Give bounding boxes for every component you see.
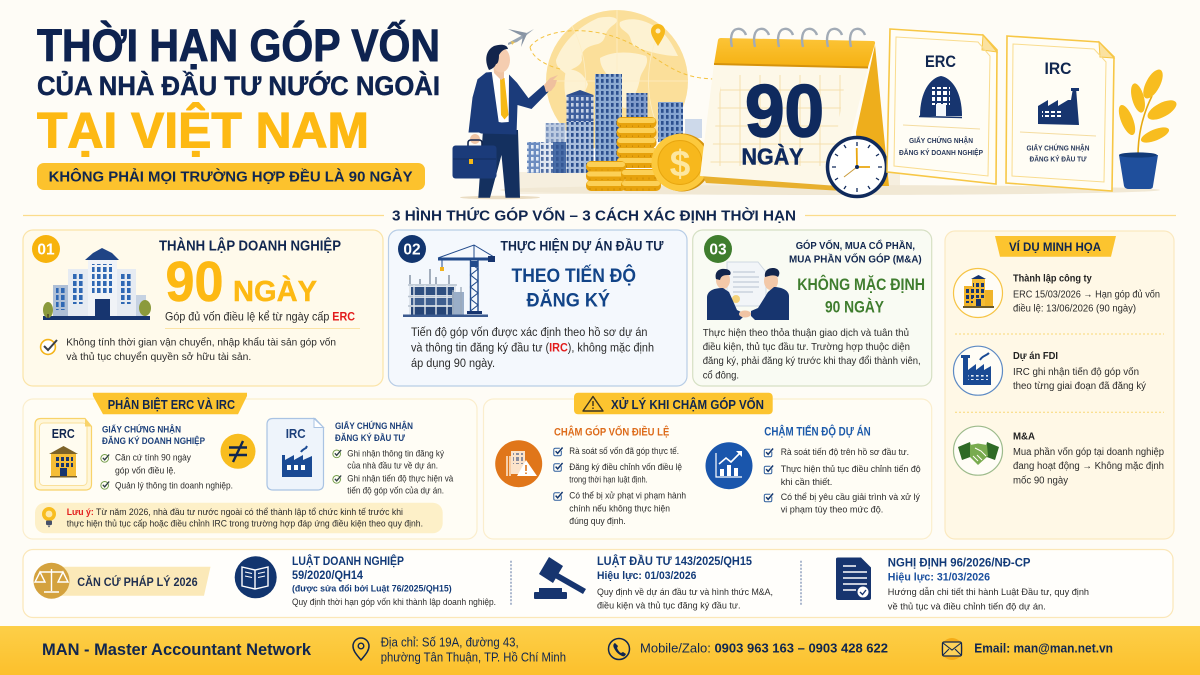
example: M&A: M&A <box>1013 431 1035 442</box>
pointing hand <box>544 75 558 92</box>
legal basis label <box>34 563 210 599</box>
bullet: Ghi nhận tiến độ thực hiện và <box>347 474 454 485</box>
example: M&A: mốc 90 ngày <box>1013 474 1068 486</box>
trousers <box>478 130 520 198</box>
bullet <box>554 462 682 485</box>
card title <box>789 238 922 266</box>
card body: và thông tin đăng ký đầu tư (IRC), không mặc định <box>411 342 654 354</box>
icon: handshake with contract <box>707 262 789 320</box>
icon: growth chart <box>706 442 752 489</box>
law 1: luật doanh nghiệp: Quy định thời hạn góp vốn khi thành lập doanh nghiệp. <box>292 597 496 607</box>
shirt <box>493 72 510 122</box>
card body: điều kiện, thủ tục đầu tư. Trường hợp thuộc diện <box>703 341 910 353</box>
title line 2: CỦA NHÀ ĐẦU TƯ NƯỚC NGOÀI <box>37 69 440 101</box>
coins <box>586 117 711 192</box>
bullet <box>554 491 686 527</box>
card body: áp dụng 90 ngày. <box>411 358 495 370</box>
panel: 01 thành lập doanh nghiệp <box>23 230 383 386</box>
icon: globe <box>530 10 718 152</box>
section heading: 3 HÌNH THỨC GÓP VỐN – 3 CÁCH XÁC ĐỊNH THỜI HẠN <box>392 206 796 224</box>
card title: MUA PHẦN VỐN GÓP (M&A) <box>789 252 922 266</box>
bullet: Quản lý thông tin doanh nghiệp. <box>115 480 233 491</box>
icon: open book <box>235 556 277 598</box>
bullet: Rà soát số vốn đã góp thực tế. <box>569 446 679 457</box>
example: M&A <box>954 426 1164 486</box>
title line 3: TẠI VIỆT NAM <box>37 102 369 158</box>
bullet <box>333 449 444 471</box>
IRC details: GIẤY CHỨNG NHẬN <box>335 420 413 431</box>
panel heading badge: XỬ LÝ KHI CHẬM GÓP VỐN <box>611 397 764 412</box>
email <box>941 638 1113 660</box>
panel heading badge: VÍ DỤ MINH HỌA <box>1009 241 1101 254</box>
document ERC: ERC <box>52 427 75 441</box>
bullet: Đăng ký điều chỉnh vốn điều lệ <box>569 462 682 473</box>
icon: document check <box>836 558 871 600</box>
card title: THÀNH LẬP DOANH NGHIỆP <box>159 236 341 254</box>
card note: và thủ tục chuyển quyền sở hữu tài sản. <box>66 351 251 363</box>
example: dự án FDI: IRC ghi nhận tiến độ góp vốn <box>1013 366 1139 378</box>
ERC caption: GIẤY CHỨNG NHẬN <box>909 135 973 145</box>
hair <box>486 45 508 70</box>
bullet: Rà soát tiến độ trên hồ sơ đầu tư. <box>781 447 909 458</box>
icon: yellow office <box>954 268 1002 318</box>
icon: green handshake <box>954 426 1002 475</box>
bullet <box>333 474 454 496</box>
law 3: nghị định: về thủ tục và điều chỉnh tiến độ dự án. <box>888 601 1046 611</box>
example: thành lập công ty: điều lệ: 13/06/2026 (90 ngày) <box>1013 303 1136 315</box>
hero illustration <box>452 10 1179 199</box>
highlight line 1: THEO TIẾN ĐỘ <box>512 263 636 287</box>
law 2: luật đầu tư: Quy định về dự án đầu tư và hình thức M&A, <box>597 587 773 597</box>
icon: building warning <box>495 440 542 487</box>
calendar number 90: 90 <box>745 70 824 152</box>
calendar <box>700 29 889 192</box>
bullet: Căn cứ tính 90 ngày <box>115 453 191 464</box>
calendar header <box>714 38 875 67</box>
note callout <box>35 503 443 533</box>
holding hand <box>470 134 480 144</box>
card title: THỰC HIỆN DỰ ÁN ĐẦU TƯ <box>500 236 664 254</box>
badge 01 <box>32 235 60 263</box>
example: dự án FDI <box>954 346 1146 395</box>
icon: factory <box>282 446 312 477</box>
icon: location pin <box>651 24 665 46</box>
big label ngày: NGÀY <box>233 274 317 308</box>
bullet: Thực hiện thủ tục điều chỉnh tiến độ <box>781 464 921 475</box>
badge 02: 02 <box>403 242 421 258</box>
panel heading badge <box>995 236 1116 257</box>
calendar page <box>700 64 868 186</box>
document IRC <box>267 418 324 490</box>
city buildings <box>527 74 702 173</box>
big dollar coin: $ <box>670 143 691 184</box>
panel: ví dụ minh họa <box>945 231 1174 539</box>
example: M&A: đang hoạt động → Không mặc định <box>1013 461 1164 472</box>
bullet: đúng quy định. <box>569 516 626 527</box>
law 1: luật doanh nghiệp <box>235 555 496 607</box>
calendar label ngày: NGÀY <box>742 142 804 170</box>
panel heading badge: PHÂN BIỆT ERC VÀ IRC <box>108 397 236 412</box>
bullet: của nhà đầu tư về dự án. <box>347 460 438 471</box>
card body <box>703 327 921 381</box>
icon: airplane <box>508 29 534 47</box>
ground <box>403 314 488 317</box>
tower crane <box>470 259 478 313</box>
certificate ERC: ĐĂNG KÝ DOANH NGHIỆP <box>899 148 983 157</box>
certificate ERC <box>887 29 997 184</box>
calendar stand <box>856 45 889 186</box>
law 3: nghị định <box>836 558 1089 611</box>
IRC details <box>333 420 454 496</box>
icon: not equal <box>220 434 256 469</box>
subtitle pill: KHÔNG PHẢI MỌI TRƯỜNG HỢP ĐỀU LÀ 90 NGÀY <box>49 168 413 186</box>
column: chậm góp vốn điều lệ: CHẬM GÓP VỐN ĐIỀU LỆ <box>554 425 669 439</box>
icon: location pin <box>353 638 369 660</box>
icon: factory <box>1038 88 1079 125</box>
calendar base <box>703 176 868 192</box>
example: dự án FDI: Dự án FDI <box>1013 351 1058 362</box>
footer bar <box>0 626 1200 675</box>
bullet: chính nếu không thực hiện <box>569 503 670 514</box>
card note: Không tính thời gian vận chuyển, nhập khẩu tài sản góp vốn <box>66 336 336 348</box>
law 3: nghị định: Hướng dẫn chi tiết thi hành Luật Đầu tư, quy định <box>888 587 1089 597</box>
highlight line 2: 90 NGÀY <box>825 297 884 316</box>
title block <box>37 20 440 158</box>
bullet: khi cần thiết. <box>781 477 832 488</box>
brand name: MAN - Master Accountant Network <box>42 641 312 659</box>
law 2: luật đầu tư: điều kiện và thủ tục đăng ký đầu tư. <box>597 600 740 610</box>
ERC details: GIẤY CHỨNG NHẬN <box>102 423 181 434</box>
icon: office complex <box>43 248 151 320</box>
bullet: tiến độ góp vốn của dự án. <box>347 485 444 496</box>
note callout: thực hiện thủ tục cấp hoặc điều chỉnh IRC trong trường hợp đáp ứng điều kiện theo quy định. <box>67 519 423 530</box>
bullet <box>764 464 921 488</box>
ERC details <box>101 423 233 491</box>
icon: check <box>41 340 57 354</box>
card title: GÓP VỐN, MUA CỔ PHẦN, <box>796 238 915 252</box>
flight path <box>530 31 718 79</box>
icon: light bulb <box>42 507 56 528</box>
icon: scales <box>35 569 68 592</box>
example: M&A: Mua phần vốn góp tại doanh nghiệp <box>1013 446 1164 458</box>
bullet: Có thể bị xử phạt vi phạm hành <box>569 491 686 502</box>
legal basis label: CĂN CỨ PHÁP LÝ 2026 <box>77 576 198 589</box>
law 1: luật doanh nghiệp: LUẬT DOANH NGHIỆP <box>292 555 404 568</box>
icon: gavel <box>534 557 586 599</box>
panel heading badge <box>93 393 247 414</box>
bullet: góp vốn điều lệ. <box>115 465 176 476</box>
panel: phân biệt ERC và IRC <box>23 393 477 539</box>
bullet: Có thể bị yêu cầu giải trình và xử lý <box>781 492 920 503</box>
IRC caption: GIẤY CHỨNG NHẬN <box>1026 142 1090 152</box>
document ERC <box>35 418 92 490</box>
icon: construction and crane <box>403 245 495 317</box>
address: Địa chỉ: Số 19A, đường 43, <box>381 636 519 650</box>
card body: Thực hiện theo thỏa thuận giao dịch và tuân thủ <box>703 327 909 339</box>
title line 1: THỜI HẠN GÓP VỐN <box>37 20 440 71</box>
address <box>353 636 566 665</box>
badge 01: 01 <box>37 242 55 258</box>
panel heading badge <box>574 393 773 414</box>
law 3: nghị định: Hiệu lực: 31/03/2026 <box>888 571 990 583</box>
panel: 02 thực hiện dự án đầu tư <box>388 230 687 386</box>
bullet <box>101 453 191 476</box>
icon: briefcase <box>452 140 496 178</box>
panel: xử lý khi chậm góp vốn <box>484 393 932 539</box>
ERC label: ERC <box>925 52 956 71</box>
jacket <box>468 72 548 134</box>
businessman <box>460 45 558 199</box>
email: Email: man@man.net.vn <box>974 640 1113 655</box>
neck and face <box>493 62 504 80</box>
IRC details: ĐĂNG KÝ ĐẦU TƯ <box>335 432 405 443</box>
card body <box>411 327 654 370</box>
subtitle pill <box>37 163 425 190</box>
certificate IRC: ĐĂNG KÝ ĐẦU TƯ <box>1030 154 1087 164</box>
example: thành lập công ty <box>954 268 1160 318</box>
card body: cổ đông. <box>703 369 739 381</box>
card body: Tiến độ góp vốn được xác định theo hồ sơ dự án <box>411 327 648 339</box>
law 3: nghị định: NGHỊ ĐỊNH 96/2026/NĐ-CP <box>888 558 1031 570</box>
icon: clock <box>828 138 886 196</box>
badge 03: 03 <box>709 242 727 258</box>
bullet: vi phạm tùy theo mức độ. <box>781 505 883 516</box>
bullet <box>764 492 920 516</box>
law 2: luật đầu tư <box>534 555 773 610</box>
icon: potted plant <box>1115 67 1179 189</box>
card body: đăng ký, phải đăng ký trước khi thay đổi thành viên, <box>703 355 921 367</box>
phone: Mobile/Zalo: 0903 963 163 – 0903 428 622 <box>640 640 888 655</box>
law 2: luật đầu tư: Hiệu lực: 01/03/2026 <box>597 570 696 582</box>
icon: envelope <box>941 638 963 660</box>
icon: blue factory <box>954 346 1002 395</box>
example: dự án FDI: theo từng giai đoạn đã đăng ký <box>1013 381 1146 392</box>
law 1: luật doanh nghiệp: 59/2020/QH14 <box>292 570 364 582</box>
example: thành lập công ty: ERC 15/03/2026 → Hạn góp đủ vốn <box>1013 289 1160 301</box>
bullet: Ghi nhận thông tin đăng ký <box>347 449 444 460</box>
calendar rings <box>731 29 865 47</box>
certificate IRC <box>1006 36 1114 191</box>
deadline note: Góp đủ vốn điều lệ kể từ ngày cấp ERC <box>165 310 355 324</box>
icon: office building <box>919 76 962 118</box>
column: chậm góp vốn điều lệ <box>554 425 686 527</box>
example: thành lập công ty: Thành lập công ty <box>1013 274 1092 285</box>
tie <box>500 78 508 120</box>
badge 03 <box>704 235 732 263</box>
unfinished building <box>410 269 449 285</box>
address: phường Tân Thuận, TP. Hồ Chí Minh <box>381 651 566 665</box>
law 1: luật doanh nghiệp: (được sửa đổi bởi Luật 76/2025/QH15) <box>292 583 452 594</box>
highlight line 2: ĐĂNG KÝ <box>526 288 610 312</box>
note callout: Lưu ý: Từ năm 2026, nhà đầu tư nước ngoài có thể thành lập tổ chức kinh tế trước khi <box>67 507 403 518</box>
card note <box>66 336 336 363</box>
document IRC: IRC <box>286 427 306 441</box>
panel: 03 góp vốn M&A <box>693 230 932 386</box>
ground shadow <box>510 172 900 194</box>
icon: yellow office <box>49 446 78 478</box>
law 2: luật đầu tư: LUẬT ĐẦU TƯ 143/2025/QH15 <box>597 555 753 568</box>
column: chậm tiến độ dự án <box>764 426 921 516</box>
IRC label: IRC <box>1044 59 1072 78</box>
icon: warning <box>583 396 603 411</box>
column: chậm tiến độ dự án: CHẬM TIẾN ĐỘ DỰ ÁN <box>764 426 871 439</box>
phone <box>608 638 888 660</box>
badge 02 <box>398 235 426 263</box>
panel: căn cứ pháp lý 2026 <box>23 550 1173 618</box>
big number 90: 90 <box>166 250 224 314</box>
bullet: trong thời hạn luật định. <box>569 474 648 485</box>
icon: phone <box>608 638 630 660</box>
highlight line 1: KHÔNG MẶC ĐỊNH <box>797 275 925 294</box>
ERC details: ĐĂNG KÝ DOANH NGHIỆP <box>102 435 205 446</box>
